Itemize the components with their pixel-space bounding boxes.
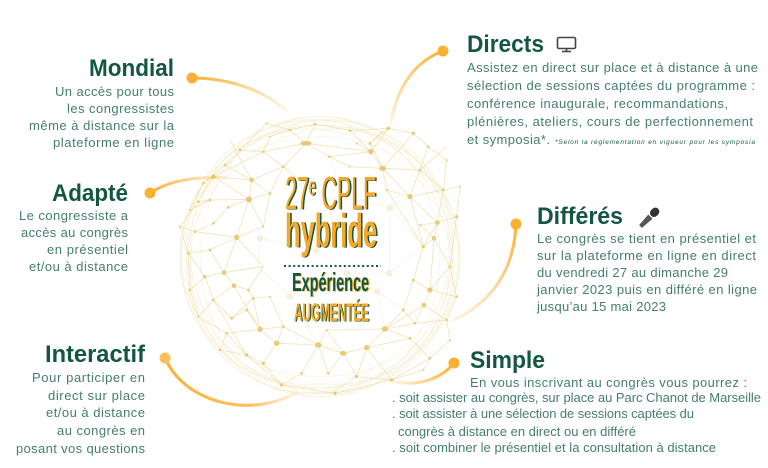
text: Différés description: du vendredi 27 au dimanche 29 <box>537 265 728 280</box>
text: Mondial description: les congressistes <box>67 101 174 116</box>
subtitle: Expérience: Expérience <box>292 267 369 297</box>
text: Interactif description: Pour participer en <box>32 370 145 385</box>
heading: Directs: Directs <box>467 31 544 58</box>
central title: AUGMENTÉE <box>295 298 370 328</box>
text: Adapté description: Le congressiste a <box>19 208 129 223</box>
title line: hybride: hybride <box>285 204 377 257</box>
text: Directs description: sélection de sessions captées du programme : <box>467 78 755 93</box>
text: Interactif description: posant vos questions <box>16 441 146 456</box>
block: Adapté <box>19 180 129 274</box>
block: Différés <box>536 203 757 314</box>
connector: Simple <box>388 358 460 383</box>
title line: 27e CPLF: e <box>309 171 315 201</box>
text: Interactif description: et/ou à distance <box>46 405 145 420</box>
subtitle: Expérience: Expérience <box>293 268 370 298</box>
central title: AUGMENTÉE <box>294 298 369 327</box>
text: Simple description <box>392 375 761 455</box>
text: Mondial description: Un accès pour tous <box>55 84 174 99</box>
text: Adapté description <box>19 208 129 274</box>
text: Différés description <box>536 231 757 314</box>
text: Directs description: plénières, ateliers, cours de perfectionnement <box>467 114 753 129</box>
title line: hybride <box>285 204 378 258</box>
text: Directs description: *Selon la réglementation en vigueur pour les symposia <box>555 139 755 146</box>
connector: Différés <box>450 218 522 322</box>
block: Directs <box>467 31 758 147</box>
network globe <box>131 66 509 447</box>
dotted separator <box>284 265 381 267</box>
heading: Interactif: Interactif <box>45 341 146 368</box>
text: Simple description: . soit combiner le présentiel et la consultation à distance <box>392 440 716 455</box>
text: Mondial description <box>29 84 175 150</box>
text: Simple description: . soit assister à une sélection de sessions captées du <box>392 406 694 421</box>
text: Interactif description <box>16 370 146 456</box>
connector: Adapté <box>144 178 228 198</box>
text: Directs description: Assistez en direct sur place et à distance à une <box>467 60 758 75</box>
title line: 27e CPLF: 27 <box>285 167 336 219</box>
icon: monitor <box>558 38 576 52</box>
heading: Mondial: Mondial <box>89 55 174 82</box>
connector: Mondial <box>186 72 288 112</box>
title line: 27e CPLF: 27 <box>286 168 338 220</box>
connector: Interactif <box>160 352 298 405</box>
title line: 27e CPLF <box>285 167 378 220</box>
text: Adapté description: en présentiel <box>47 242 128 257</box>
central title <box>284 167 381 328</box>
icon: microphone <box>638 206 661 229</box>
heading: Différés: Différés <box>537 203 623 230</box>
text: Différés description: jusqu’au 15 mai 2023 <box>536 299 666 314</box>
text: CPLF <box>317 168 378 220</box>
text: Directs description: conférence inaugurale, recommandations, <box>467 96 728 111</box>
block: Simple <box>392 347 761 455</box>
text: Différés description: sur la plateforme en ligne en direct <box>537 248 756 263</box>
text: Différés description: janvier 2023 puis en différé en ligne <box>536 282 757 297</box>
text: CPLF <box>315 167 376 219</box>
title line: hybride: hybride <box>286 204 378 258</box>
text: Directs description <box>467 60 758 147</box>
text: Directs description: et symposia*. <box>467 132 550 147</box>
block: Mondial <box>29 55 175 150</box>
text: Simple description: En vous inscrivant au congrès vous pourrez : <box>470 375 747 390</box>
subtitle: Expérience <box>292 267 370 298</box>
text: Mondial description: même à distance sur la <box>29 118 175 133</box>
text: Interactif description: au congrès en <box>57 423 145 438</box>
text: Simple description: congrès à distance en direct ou en différé <box>398 424 636 439</box>
connector: Directs <box>390 46 448 128</box>
text: Interactif description: direct sur place <box>48 388 145 403</box>
text: Mondial description: plateforme en ligne <box>53 135 174 150</box>
text: Différés description: Le congrès se tient en présentiel et <box>537 231 756 246</box>
title line: 27e CPLF: e <box>310 172 317 202</box>
text: Simple description: . soit assister au congrès, sur place au Parc Chanot de Marseille <box>392 390 761 405</box>
subtitle: AUGMENTÉE <box>294 298 370 328</box>
block: Interactif <box>16 341 146 456</box>
heading: Simple: Simple <box>470 347 545 374</box>
heading: Adapté: Adapté <box>52 180 128 207</box>
text: Adapté description: accès au congrès <box>21 225 128 240</box>
text: Adapté description: et/ou à distance <box>29 259 128 274</box>
